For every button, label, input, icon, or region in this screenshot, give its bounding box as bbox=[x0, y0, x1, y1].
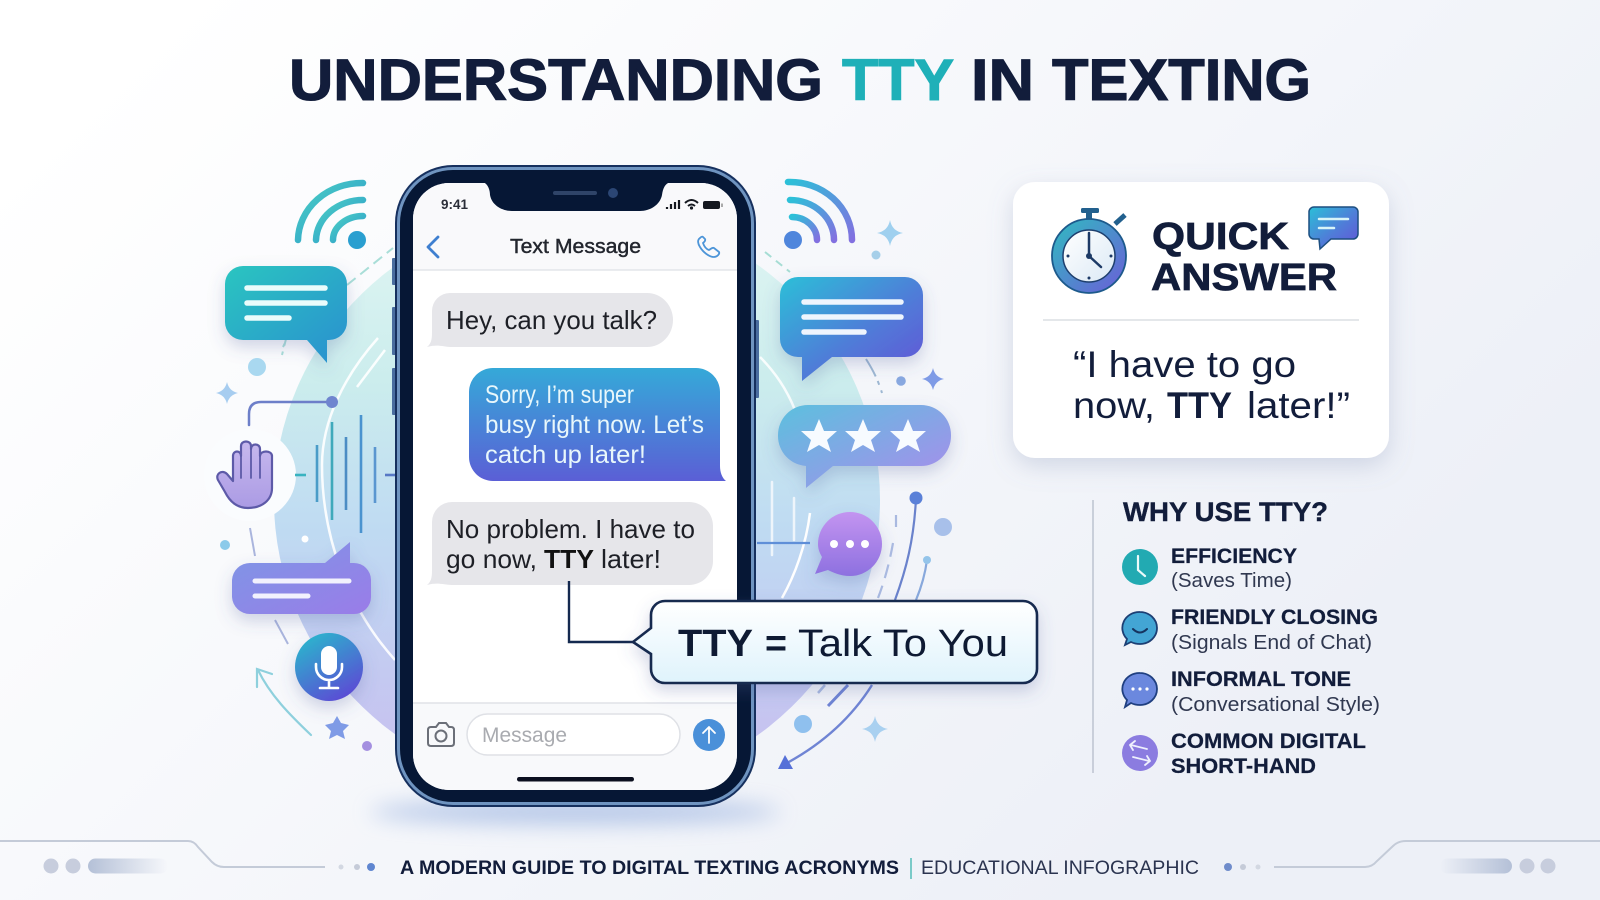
icon: camera bbox=[428, 723, 454, 746]
message input: Message bbox=[482, 724, 567, 747]
message: no problem TTY later: TTY bbox=[544, 544, 594, 574]
signal lines to purple bubble bbox=[757, 482, 810, 598]
message: sorry busy: catch up later! bbox=[485, 441, 646, 469]
heading: why use TTY: WHY USE TTY? bbox=[1123, 497, 1328, 527]
audio waveform bbox=[295, 415, 395, 533]
message: no problem TTY later: later! bbox=[601, 544, 661, 574]
icon: typing bubble bbox=[815, 512, 882, 576]
footer text: EDUCATIONAL INFOGRAPHIC bbox=[921, 858, 1199, 879]
message: sorry busy bbox=[469, 368, 726, 481]
footer left ornament bbox=[0, 841, 375, 874]
icon: blue chat bubble bbox=[780, 277, 923, 381]
message: sorry busy: busy right now. Let’s bbox=[485, 411, 704, 439]
item: common digital shorthand: COMMON DIGITAL bbox=[1171, 730, 1366, 753]
background circle behind phone bbox=[204, 207, 880, 793]
icon: stopwatch bbox=[1052, 208, 1126, 293]
curved connectors with dots bbox=[878, 492, 952, 600]
title bbox=[289, 48, 1311, 113]
item: efficiency: (Saves Time) bbox=[1171, 570, 1292, 592]
arrow, star and dot bbox=[257, 669, 372, 751]
footer text bbox=[400, 858, 1199, 879]
footer bbox=[0, 841, 1600, 879]
title: TEXTING bbox=[1052, 48, 1311, 113]
message: sorry busy: Sorry, I’m super bbox=[485, 381, 634, 409]
decorative right cluster bbox=[757, 182, 952, 769]
icon: send button bbox=[693, 719, 725, 751]
phone screen bbox=[413, 183, 737, 790]
quote: later!” bbox=[1247, 385, 1350, 426]
status bar: 9:41 bbox=[441, 196, 468, 212]
title: IN bbox=[971, 48, 1034, 113]
item: informal tone: (Conversational Style) bbox=[1171, 694, 1380, 716]
decorative left cluster bbox=[216, 183, 395, 751]
item: friendly closing: FRIENDLY CLOSING bbox=[1171, 606, 1378, 629]
message: no problem TTY later bbox=[427, 502, 713, 585]
status bar bbox=[441, 196, 723, 212]
dashed path left bbox=[282, 248, 393, 355]
phone bbox=[392, 165, 759, 807]
panel: quick answer bbox=[1013, 182, 1389, 458]
callout: TTY meaning: TTY bbox=[678, 623, 753, 665]
icon: star rating bubble bbox=[778, 405, 951, 488]
title: UNDERSTANDING bbox=[289, 48, 823, 113]
icon: teal chat bubble bbox=[225, 266, 347, 363]
icon: microphone bbox=[295, 633, 363, 701]
quote: TTY bbox=[1167, 385, 1232, 426]
item: informal tone: INFORMAL TONE bbox=[1171, 668, 1351, 691]
phone body bbox=[395, 165, 756, 807]
phone shadow bbox=[370, 800, 780, 824]
quote: now, bbox=[1073, 385, 1155, 426]
icon: raised hand bbox=[217, 442, 272, 508]
item: common digital shorthand: SHORT-HAND bbox=[1171, 755, 1316, 778]
heading: quick answer: ANSWER bbox=[1151, 257, 1337, 299]
small dots and dashes bbox=[220, 528, 308, 644]
quote bbox=[1073, 344, 1350, 426]
navigation header: Text Message bbox=[510, 236, 641, 258]
icon: left wifi signal bbox=[298, 183, 366, 249]
item: friendly closing bbox=[1122, 606, 1378, 654]
item: common digital shorthand bbox=[1122, 730, 1366, 778]
footer text: A MODERN GUIDE TO DIGITAL TEXTING ACRONYMS bbox=[400, 858, 899, 879]
message input bbox=[467, 714, 680, 755]
icon: lavender chat bubble bbox=[232, 542, 371, 614]
item: efficiency bbox=[1122, 545, 1297, 592]
quote: “I have to go bbox=[1073, 344, 1296, 385]
title: TTY bbox=[842, 48, 954, 113]
sparkles and dots top right bbox=[765, 220, 944, 393]
item: efficiency: EFFICIENCY bbox=[1171, 545, 1297, 568]
dot and sparkle bbox=[216, 358, 266, 404]
message: no problem TTY later: go now, bbox=[446, 544, 537, 574]
message: hey can you talk: Hey, can you talk? bbox=[446, 305, 657, 335]
panel: why use TTY bbox=[1093, 497, 1380, 778]
home indicator bbox=[517, 777, 634, 782]
curved arrow bottom right bbox=[778, 685, 888, 769]
message: no problem TTY later: No problem. I have to bbox=[446, 514, 695, 544]
divider bbox=[1043, 319, 1359, 321]
callout: TTY meaning: Talk To You bbox=[798, 623, 1008, 665]
item: friendly closing: (Signals End of Chat) bbox=[1171, 632, 1372, 654]
navigation header bbox=[428, 236, 719, 258]
icon: small chat bubble bbox=[1309, 207, 1358, 249]
heading: quick answer bbox=[1151, 216, 1337, 299]
connector line to hand bbox=[249, 396, 338, 425]
notch bbox=[483, 178, 670, 211]
input bar bbox=[428, 714, 725, 755]
footer right ornament bbox=[1224, 841, 1600, 874]
icon: right wifi signal bbox=[784, 182, 852, 249]
item: informal tone bbox=[1122, 668, 1380, 716]
message: hey can you talk bbox=[427, 293, 673, 347]
callout: TTY meaning bbox=[569, 581, 1037, 683]
heading: quick answer: QUICK bbox=[1152, 216, 1290, 258]
callout: TTY meaning: = bbox=[765, 623, 787, 665]
side buttons bbox=[392, 258, 759, 415]
